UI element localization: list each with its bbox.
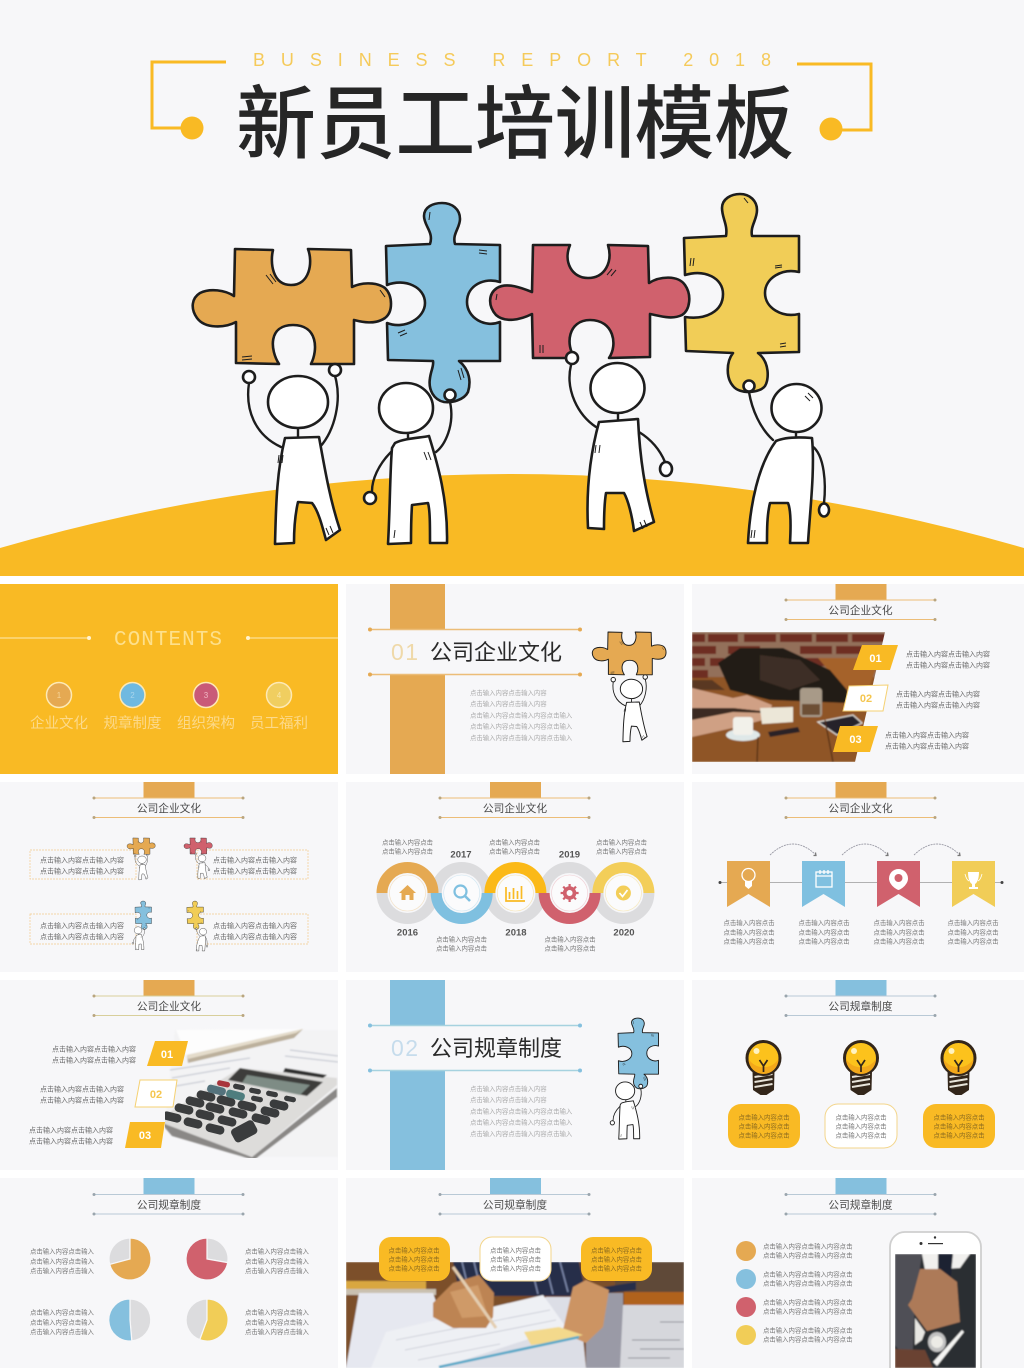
list text 2: 点击输入内容点击输入内容	[40, 1084, 124, 1094]
badge 03	[833, 726, 878, 752]
icon: gear	[552, 875, 588, 911]
box bottom right: 点击输入内容点击输入内容	[213, 921, 297, 930]
callout 3: 点击输入内容点击	[591, 1254, 642, 1264]
hero background	[0, 0, 1024, 576]
timeline captions: 点击输入内容点击	[489, 838, 540, 846]
contents item 3: 3	[204, 691, 209, 700]
icon: check	[605, 875, 641, 911]
flag captions: 点击输入内容点击	[873, 937, 925, 946]
section text: 点击输入内容点击输入内容点击输入	[470, 733, 573, 742]
callout 1: 点击输入内容点击	[738, 1122, 790, 1130]
callout 1: 点击输入内容点击	[738, 1112, 790, 1122]
callout 2: 点击输入内容点击	[835, 1122, 887, 1130]
timeline years: 2016	[397, 928, 418, 938]
box top right: 点击输入内容点击输入内容	[213, 856, 297, 864]
panel: light bulbs	[692, 980, 1024, 1170]
callout 3: 点击输入内容点击	[591, 1246, 642, 1254]
flag: trophy	[952, 861, 995, 907]
icon: blue puzzle figure	[610, 1018, 658, 1139]
list text 1: 点击输入内容点击输入内容	[52, 1044, 136, 1054]
list item 2	[736, 1269, 852, 1289]
timeline captions: 点击输入内容点击	[544, 944, 596, 953]
callout 3	[923, 1104, 995, 1148]
timeline captions: 点击输入内容点击	[382, 847, 433, 856]
heading: 公司企业文化	[828, 604, 893, 617]
flag captions: 点击输入内容点击	[798, 937, 850, 946]
callout 1: 点击输入内容点击	[738, 1130, 790, 1140]
pie captions: 点击输入内容点击输入	[245, 1308, 310, 1316]
badge 02: 02	[150, 1089, 162, 1101]
icon: bulb 1	[747, 1042, 780, 1095]
list item 2: 点击输入内容点击输入内容点击	[763, 1278, 852, 1288]
flag captions: 点击输入内容点击	[947, 918, 999, 927]
contents item 4	[250, 682, 308, 732]
flag captions: 点击输入内容点击	[947, 937, 999, 946]
list item 3	[736, 1297, 852, 1317]
box bottom left: 点击输入内容点击输入内容	[40, 932, 124, 941]
callout 2: 点击输入内容点击	[490, 1264, 541, 1272]
list item 1: 点击输入内容点击输入内容点击	[763, 1250, 852, 1260]
phone	[890, 1232, 981, 1368]
photo: calculator and pen	[160, 1029, 338, 1160]
section number: 01	[391, 639, 418, 665]
timeline years: 2020	[613, 928, 635, 938]
contents item 1	[30, 682, 88, 732]
flag captions	[723, 918, 999, 946]
list item 4	[736, 1325, 852, 1345]
callout 3: 点击输入内容点击	[933, 1112, 985, 1122]
box top right: 点击输入内容点击输入内容	[213, 866, 297, 876]
list item 4: 点击输入内容点击输入内容点击	[763, 1334, 852, 1344]
right title bracket	[797, 64, 871, 140]
contents heading: CONTENTS	[114, 629, 222, 652]
callout 3: 点击输入内容点击	[591, 1264, 642, 1272]
box top left: 点击输入内容点击输入内容	[40, 856, 124, 864]
icon: bulb 3	[942, 1042, 975, 1095]
list text 2: 点击输入内容点击输入内容	[896, 690, 980, 698]
pie captions: 点击输入内容点击输入	[30, 1317, 95, 1326]
section text: 点击输入内容点击输入内容	[470, 1084, 547, 1093]
badge 02	[135, 1080, 177, 1107]
pie captions: 点击输入内容点击输入	[30, 1308, 95, 1316]
pie chart yellow	[186, 1299, 228, 1341]
timeline captions: 点击输入内容点击	[382, 838, 433, 846]
callout 2: 点击输入内容点击	[835, 1130, 887, 1140]
pie captions: 点击输入内容点击输入	[245, 1327, 310, 1336]
callout 2: 点击输入内容点击	[490, 1254, 541, 1264]
box top left: 点击输入内容点击输入内容	[40, 866, 124, 876]
icon: house	[390, 875, 426, 911]
callout 1: 点击输入内容点击	[388, 1264, 440, 1272]
list text 3: 点击输入内容点击输入内容	[29, 1136, 113, 1146]
section text: 点击输入内容点击输入内容	[470, 1095, 547, 1104]
callout 1	[379, 1237, 450, 1281]
pie captions: 点击输入内容点击输入	[30, 1327, 95, 1336]
timeline captions: 点击输入内容点击	[596, 838, 647, 846]
heading: 公司企业文化	[137, 1000, 201, 1013]
section text: 点击输入内容点击输入内容点击输入	[470, 710, 573, 719]
timeline captions: 点击输入内容点击	[436, 944, 487, 953]
flag captions: 点击输入内容点击	[723, 927, 775, 936]
callout 1: 点击输入内容点击	[388, 1246, 440, 1254]
list text 1: 点击输入内容点击输入内容	[906, 660, 990, 670]
contents item 3: 组织架构	[177, 715, 235, 732]
box bottom left: 点击输入内容点击输入内容	[40, 921, 124, 930]
callout 2: 点击输入内容点击	[835, 1112, 887, 1122]
callout 2	[480, 1237, 551, 1281]
callout 2	[825, 1104, 897, 1148]
flag captions: 点击输入内容点击	[947, 927, 999, 936]
panel: calculator	[29, 980, 338, 1158]
heading: 公司企业文化	[483, 802, 547, 815]
left title bracket	[152, 62, 226, 140]
section title: 公司企业文化	[430, 640, 562, 665]
timeline captions: 点击输入内容点击	[596, 847, 647, 856]
pie chart blue	[109, 1299, 151, 1341]
list text 2: 点击输入内容点击输入内容	[40, 1096, 124, 1104]
flow arrows	[770, 844, 960, 856]
pie captions: 点击输入内容点击输入	[245, 1266, 310, 1275]
list text 3: 点击输入内容点击输入内容	[885, 742, 969, 750]
yellow hill	[0, 474, 1024, 576]
badge 02: 02	[860, 693, 872, 705]
badge 02	[843, 685, 888, 711]
flag captions: 点击输入内容点击	[873, 918, 925, 927]
pie captions: 点击输入内容点击输入	[245, 1246, 310, 1256]
flag: bulb	[727, 861, 770, 907]
icon: magnifier	[444, 875, 480, 911]
timeline captions	[382, 838, 647, 953]
contents item 4: 员工福利	[250, 715, 308, 732]
section text: 点击输入内容点击输入内容	[470, 688, 547, 697]
badge 01: 01	[869, 653, 882, 665]
section text: 点击输入内容点击输入内容点击输入	[470, 1106, 573, 1115]
badge 03: 03	[849, 734, 862, 746]
pie chart red	[186, 1238, 228, 1280]
heading: 公司规章制度	[483, 1198, 547, 1212]
badge 01	[147, 1041, 188, 1066]
panel: timeline	[346, 782, 684, 972]
list text 3: 点击输入内容点击输入内容	[885, 730, 969, 740]
section text: 点击输入内容点击输入内容点击输入	[470, 1118, 573, 1127]
panel: contents	[0, 584, 338, 774]
section title: 公司规章制度	[430, 1036, 562, 1061]
contents item 1: 企业文化	[30, 714, 88, 732]
icon: bar chart	[497, 875, 533, 911]
badge 03	[125, 1122, 165, 1148]
calculator keys	[162, 1080, 296, 1144]
section text: 点击输入内容点击输入内容点击输入	[470, 1129, 573, 1138]
heading: 公司企业文化	[137, 802, 201, 815]
callout 1	[728, 1104, 800, 1148]
section text: 点击输入内容点击输入内容	[470, 699, 547, 708]
flag: location pin	[877, 861, 920, 907]
main title: 新员工培训模板	[236, 80, 794, 169]
list item 2: 点击输入内容点击输入内容点击	[763, 1270, 852, 1278]
panel: photo with list	[692, 584, 990, 762]
badge 01: 01	[161, 1049, 173, 1061]
heading: 公司企业文化	[828, 802, 893, 815]
contents item 4: 4	[277, 691, 282, 700]
panel: writing photo	[346, 1178, 684, 1368]
flag captions: 点击输入内容点击	[798, 927, 850, 936]
list text 2: 点击输入内容点击输入内容	[896, 700, 980, 710]
heading: 公司规章制度	[137, 1198, 201, 1212]
pie captions: 点击输入内容点击输入	[30, 1256, 95, 1265]
list item 1: 点击输入内容点击输入内容点击	[763, 1242, 852, 1250]
callout 2: 点击输入内容点击	[490, 1246, 541, 1254]
list item 4: 点击输入内容点击输入内容点击	[763, 1326, 852, 1334]
list item 3: 点击输入内容点击输入内容点击	[763, 1306, 852, 1316]
heading: 公司规章制度	[828, 1000, 893, 1013]
box bottom right	[187, 901, 308, 951]
box top right	[184, 838, 308, 879]
puzzle team illustration	[193, 194, 829, 544]
pie captions: 点击输入内容点击输入	[30, 1266, 95, 1275]
timeline years: 2017	[450, 850, 472, 860]
callout 1: 点击输入内容点击	[388, 1254, 440, 1264]
badge 03: 03	[139, 1130, 151, 1142]
list text 1: 点击输入内容点击输入内容	[52, 1056, 136, 1064]
subtitle: BUSINESS REPORT 2018	[253, 50, 771, 70]
panel: phone mockup	[736, 1178, 982, 1368]
heading: 公司规章制度	[828, 1198, 893, 1212]
panel: section 02	[346, 980, 684, 1170]
photo: hands writing	[346, 1262, 684, 1368]
contents item 2: 2	[130, 691, 135, 700]
pie captions	[30, 1246, 310, 1336]
pie captions: 点击输入内容点击输入	[30, 1246, 95, 1256]
timeline rings	[382, 867, 649, 918]
panel: section 01	[346, 584, 684, 774]
pie chart orange	[109, 1238, 151, 1280]
phone photo: watch and suit	[895, 1254, 976, 1368]
badge 01	[853, 645, 898, 670]
timeline years: 2018	[505, 928, 527, 938]
list item 1	[736, 1241, 852, 1261]
section number: 02	[391, 1035, 418, 1061]
pie captions: 点击输入内容点击输入	[245, 1256, 310, 1265]
contents item 3	[177, 682, 235, 732]
list text 3: 点击输入内容点击输入内容	[29, 1126, 113, 1134]
flag captions: 点击输入内容点击	[723, 918, 775, 927]
list text 1: 点击输入内容点击输入内容	[906, 650, 990, 658]
panel: pie charts	[0, 1178, 338, 1368]
flag captions: 点击输入内容点击	[798, 918, 850, 927]
callout 3: 点击输入内容点击	[933, 1122, 985, 1130]
timeline captions: 点击输入内容点击	[544, 934, 596, 944]
timeline years: 2019	[559, 850, 580, 860]
panel: flags	[692, 782, 1024, 972]
timeline captions: 点击输入内容点击	[436, 934, 487, 944]
list item 3: 点击输入内容点击输入内容点击	[763, 1298, 852, 1306]
timeline captions: 点击输入内容点击	[489, 847, 540, 856]
flag captions: 点击输入内容点击	[873, 927, 925, 936]
callout 3	[581, 1237, 652, 1281]
callout 3: 点击输入内容点击	[933, 1130, 985, 1140]
box bottom left	[30, 901, 152, 950]
contents item 1: 1	[57, 691, 62, 700]
box top left	[30, 838, 155, 880]
contents item 2: 规章制度	[104, 714, 162, 732]
box bottom right: 点击输入内容点击输入内容	[213, 932, 297, 941]
icon: bulb 2	[844, 1042, 878, 1095]
section text: 点击输入内容点击输入内容点击输入	[470, 722, 573, 731]
panel: four puzzle boxes	[0, 782, 338, 972]
connector line	[718, 881, 1004, 884]
icon: orange puzzle figure	[592, 632, 666, 742]
flag: calendar	[802, 861, 845, 907]
pie captions: 点击输入内容点击输入	[245, 1317, 310, 1326]
photo: desk with bag	[692, 632, 886, 762]
timeline years	[397, 850, 635, 938]
contents item 2	[104, 682, 162, 732]
flag captions: 点击输入内容点击	[723, 937, 775, 946]
